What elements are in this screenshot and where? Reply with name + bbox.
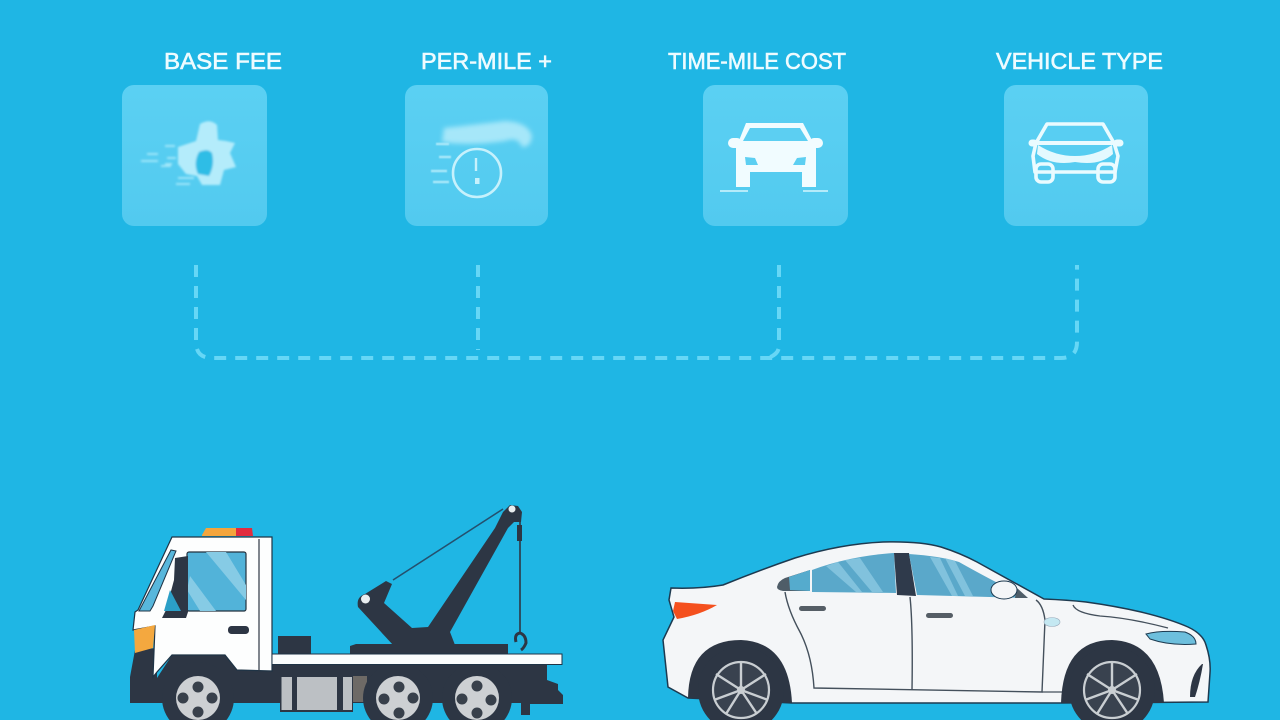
panel: vehicle type icon tile (1004, 85, 1148, 226)
front side window (909, 554, 1028, 598)
front wheel (1069, 647, 1155, 720)
icon: outlined front-view car (1032, 124, 1120, 182)
boom base and toolbox (278, 636, 508, 654)
B-pillar (894, 553, 916, 596)
front grille vent (1190, 664, 1203, 697)
icon: speedometer with motion lines (431, 121, 532, 197)
illustration: white sedan (663, 542, 1210, 720)
windshield (139, 550, 176, 611)
boom arm (358, 505, 522, 645)
front wheel arch (1061, 640, 1164, 703)
front door mirror blade (1044, 618, 1060, 626)
panel: time-mile cost icon tile (703, 85, 848, 226)
headlight (1146, 631, 1196, 644)
heading: time-mile cost: TIME-MILE COST (668, 48, 846, 74)
warning light bar (202, 528, 236, 536)
panel: per-mile icon tile (405, 85, 548, 226)
icon: base fee blob (141, 121, 236, 185)
taillight (673, 602, 717, 619)
fuel tank (280, 676, 353, 712)
front wheel (162, 662, 234, 720)
tow cable and hook (393, 509, 526, 650)
car body (663, 542, 1210, 703)
rear side window (812, 553, 896, 593)
side window (187, 552, 246, 611)
rear wheel arch (688, 640, 792, 703)
panel: base fee icon tile (122, 85, 267, 226)
rear wheel (442, 663, 512, 720)
rear wheel (698, 647, 784, 720)
icon: solid front-view car (720, 123, 828, 191)
door seams (785, 592, 1045, 692)
cab (133, 537, 272, 677)
flatbed (272, 654, 562, 664)
dashed connector linking the four factors (196, 265, 1077, 358)
illustration: tow truck (130, 505, 563, 720)
tan rear panel behind tank (353, 676, 367, 702)
amber marker light (134, 625, 155, 653)
door handle (228, 626, 249, 634)
side mirror (991, 581, 1017, 599)
door handles (799, 606, 826, 611)
rear quarter window (777, 570, 810, 591)
door pillar and mirror (162, 556, 188, 618)
truck chassis (130, 648, 563, 715)
heading: base fee: BASE FEE (164, 48, 282, 74)
heading: vehicle type: VEHICLE TYPE (996, 48, 1163, 74)
heading: per-mile: PER-MILE + (421, 48, 552, 74)
middle wheel (363, 663, 433, 720)
